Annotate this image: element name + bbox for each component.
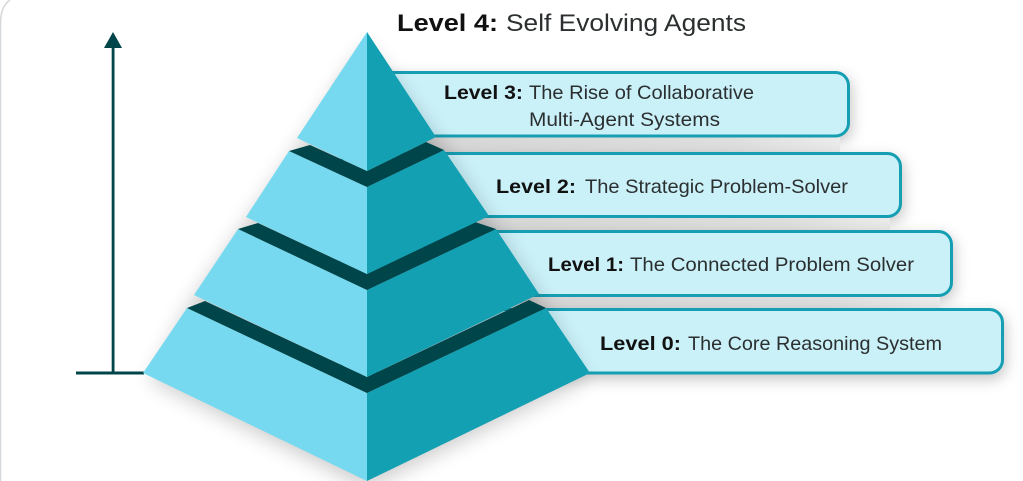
label: level 3 <box>444 82 754 131</box>
pyramid tier: apex <box>297 32 436 171</box>
title: level 4: Self Evolving Agents <box>506 10 746 37</box>
pyramid tier: base <box>143 300 590 481</box>
panel: level 1 box <box>340 218 952 296</box>
panel: level 2 box <box>340 138 900 216</box>
arrow: vertical progression axis <box>76 32 144 374</box>
label: level 1: Level 1: <box>548 254 624 276</box>
pyramid tier: upper middle <box>246 142 489 274</box>
label: level 3: Multi-Agent Systems <box>529 109 720 131</box>
label: level 2: The Strategic Problem-Solver <box>585 176 849 198</box>
label: level 3: The Rise of Collaborative <box>529 82 754 104</box>
pyramid tier: lower middle <box>194 222 539 377</box>
label: level 0: Level 0: <box>600 333 681 355</box>
label: level 3: Level 3: <box>444 82 523 104</box>
label: level 2: Level 2: <box>496 176 576 198</box>
label: level 0: The Core Reasoning System <box>688 333 942 355</box>
pyramid <box>143 32 590 481</box>
title: level 4: Level 4: <box>397 10 498 37</box>
panel: level 0 box <box>340 297 1002 373</box>
panel: level 3 box <box>340 72 848 136</box>
label: level 1: The Connected Problem Solver <box>630 254 915 276</box>
